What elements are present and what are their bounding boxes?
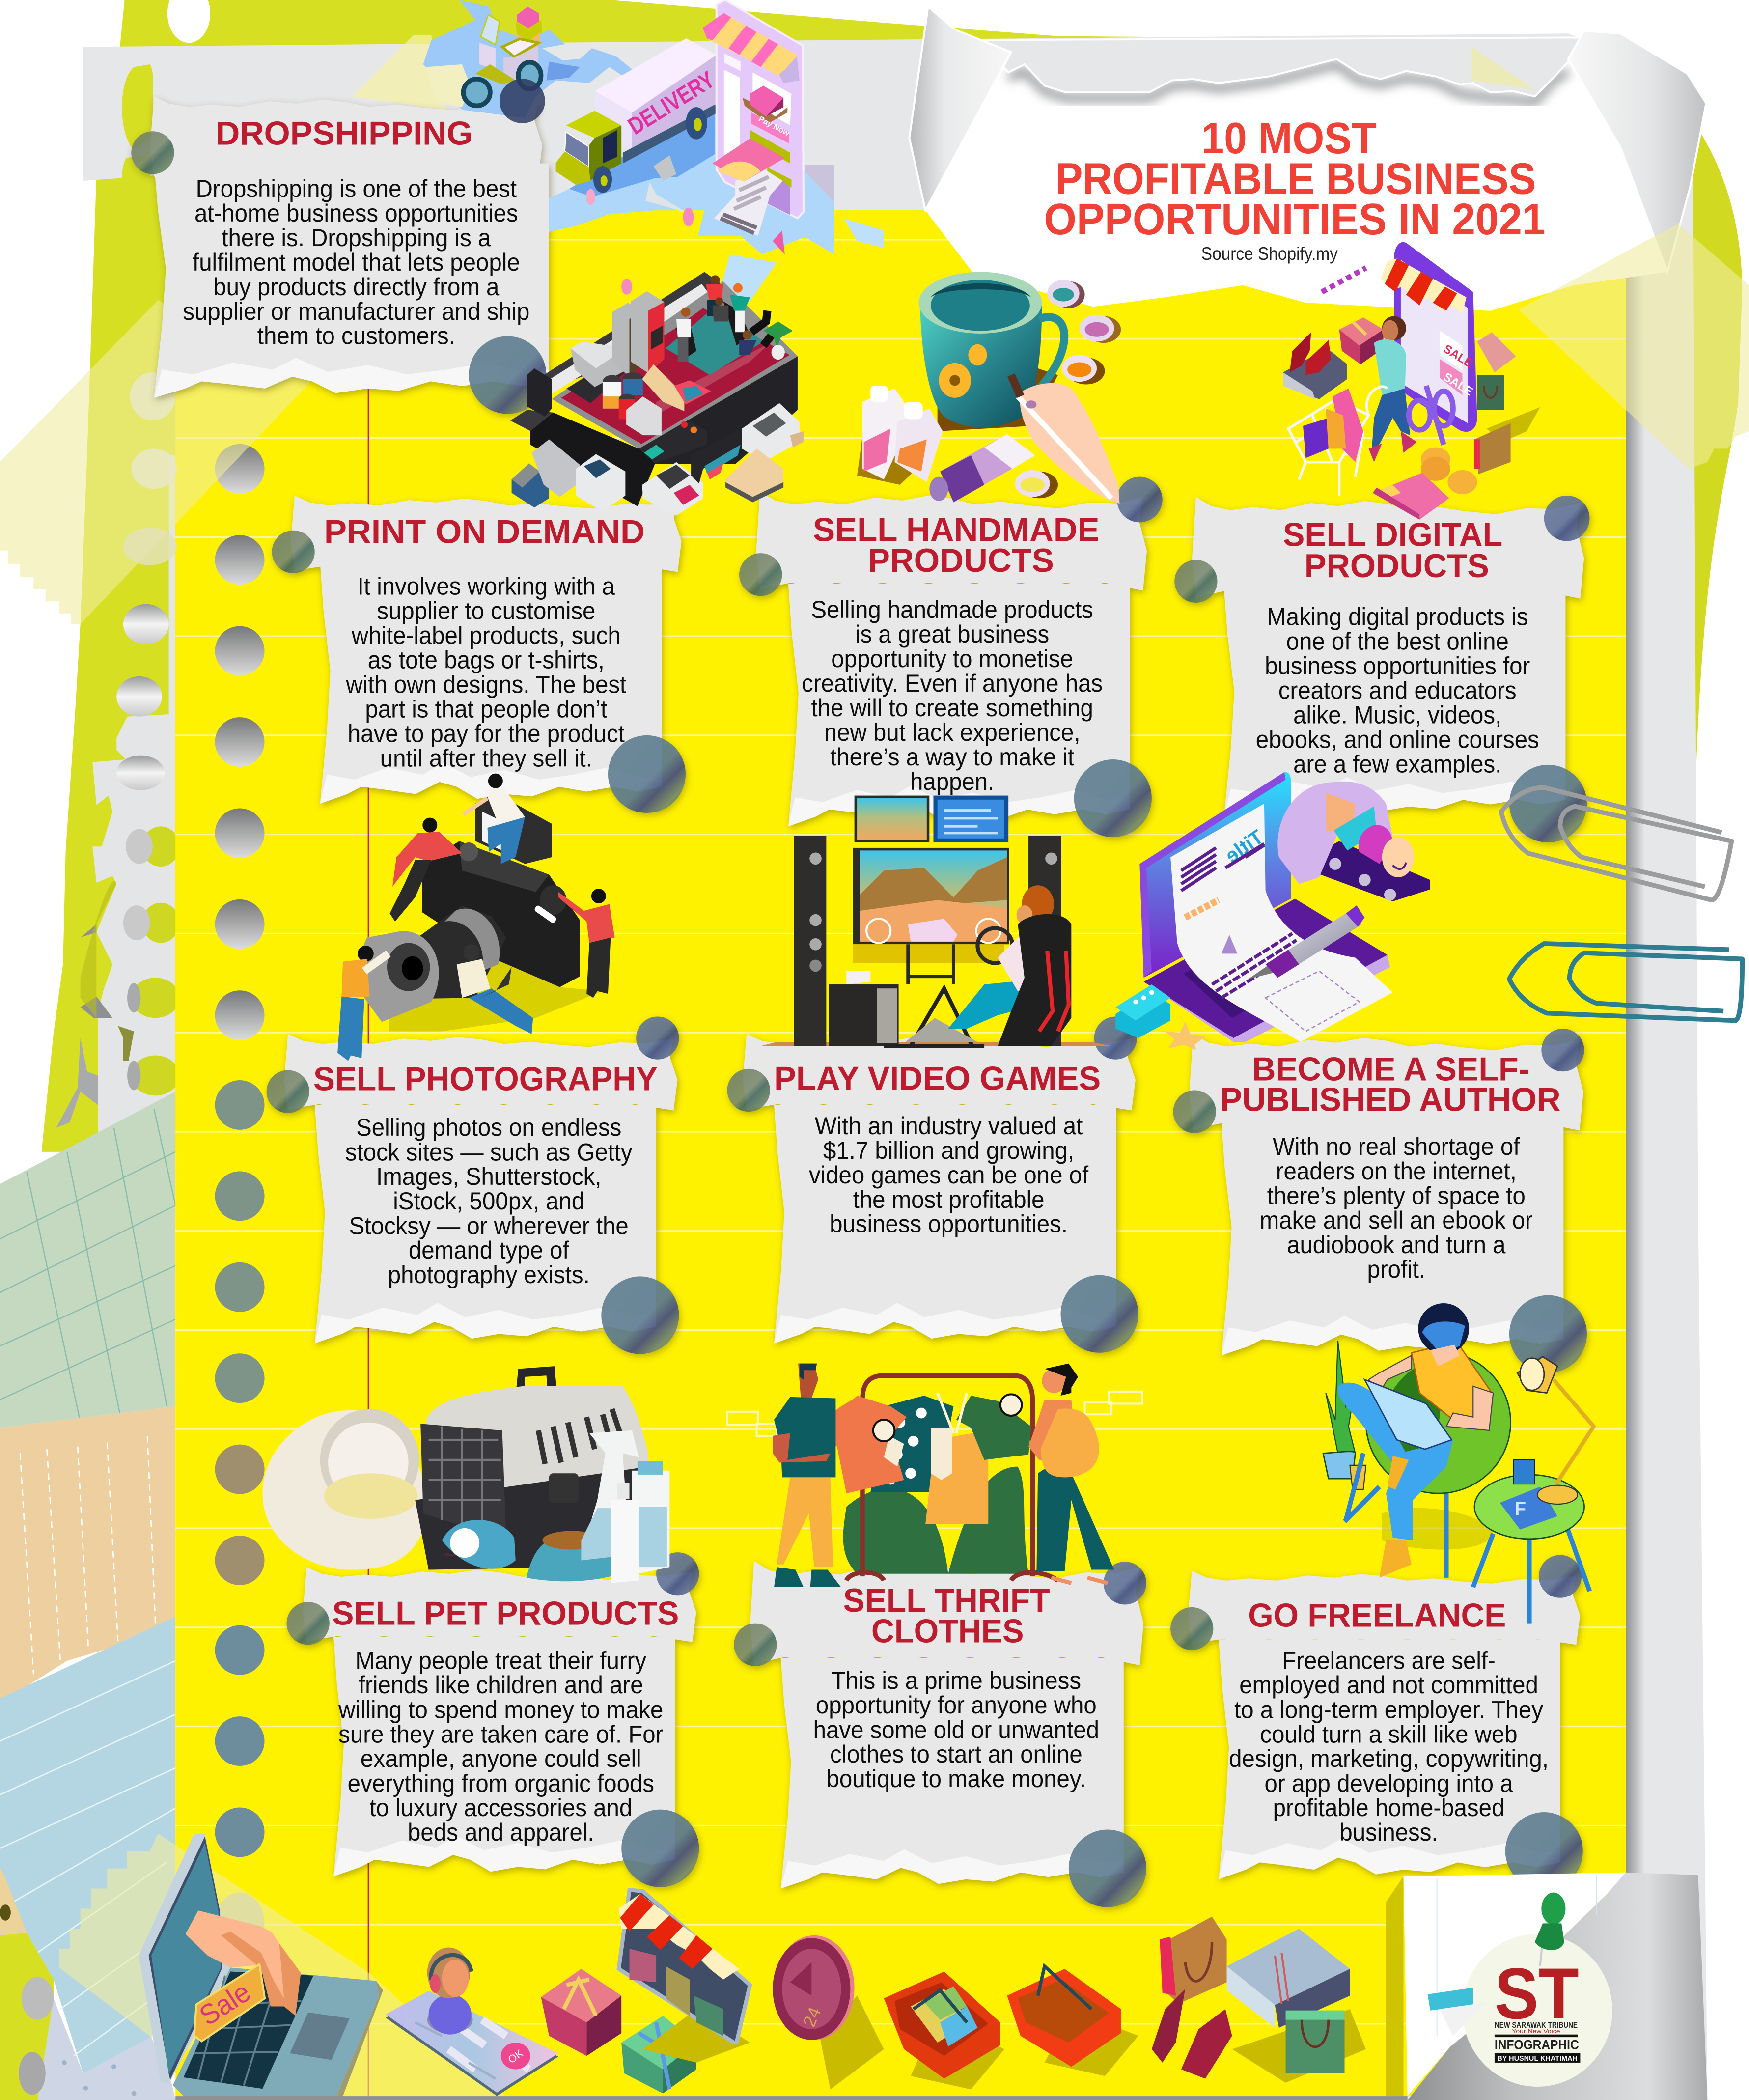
- heading: GO FREELANCE: [1248, 1597, 1506, 1634]
- body text: there’s a way to make it: [830, 744, 1075, 771]
- panel: sell thrift clothes: [734, 1561, 1146, 1907]
- body text: design, marketing, copywriting,: [1229, 1745, 1549, 1772]
- body text: With no real shortage of: [1273, 1133, 1520, 1160]
- spray bottles: [581, 1430, 669, 1583]
- logo badge: ST: [1495, 1954, 1579, 2034]
- pin over scooter: [500, 79, 545, 123]
- workers and table: [622, 275, 793, 375]
- bottom row: shopping baskets: [884, 1966, 1138, 2089]
- speakers: [794, 836, 1061, 1046]
- bags wallet coins card: [1373, 332, 1516, 520]
- body text: part is that people don’t: [365, 696, 608, 723]
- hand: [186, 1910, 301, 2016]
- heading: SELL PHOTOGRAPHY: [313, 1060, 658, 1097]
- body text: to luxury accessories and: [369, 1794, 632, 1822]
- truck: DELIVERY: [624, 66, 720, 140]
- body text: happen.: [910, 768, 994, 795]
- body text: video games can be one of: [809, 1162, 1089, 1189]
- body text: make and sell an ebook or: [1260, 1207, 1533, 1234]
- person: left red: [389, 818, 462, 922]
- body text: clothes to start an online: [830, 1741, 1083, 1768]
- gift on screen: [743, 86, 787, 123]
- heading: BECOME A SELF-: [1252, 1051, 1529, 1088]
- pins: [272, 531, 686, 813]
- carrier: [415, 1366, 648, 1570]
- green pushpin: [1535, 1893, 1565, 1966]
- pins: [1174, 496, 1589, 842]
- pins: [267, 1016, 679, 1354]
- body text: [1260, 1133, 1533, 1283]
- body text: [345, 1114, 633, 1288]
- body text: business.: [1339, 1819, 1438, 1846]
- conveyor with icons: [1277, 782, 1430, 901]
- panel: dropshipping: [131, 96, 549, 414]
- chat bubbles: [1115, 984, 1170, 1038]
- illustration: self-publishing laptop: [1115, 772, 1430, 1050]
- background paper: peach stitched: [0, 1406, 175, 1698]
- camera body: [422, 793, 580, 987]
- bottom edge: [175, 2096, 1408, 2100]
- location pins: [586, 189, 785, 295]
- heading: [1220, 1051, 1561, 1119]
- chair: [1345, 1351, 1511, 1578]
- body text: boutique to make money.: [826, 1765, 1086, 1792]
- body text: friends like children and are: [359, 1672, 643, 1699]
- tan edge, bottom left: [0, 1867, 27, 1935]
- logo badge: [1462, 1934, 1612, 2087]
- body text: there is. Dropshipping is a: [222, 224, 491, 252]
- yellow ruled sheet: [175, 210, 1626, 2096]
- body text: creators and educators: [1278, 677, 1517, 704]
- sale tag: Sale: [194, 1976, 256, 2032]
- floor: [552, 281, 798, 448]
- body text: supplier or manufacturer and ship: [183, 298, 529, 325]
- pins: [1173, 1029, 1587, 1373]
- background paper: green grid: [0, 1092, 175, 1428]
- title text: 10 MOST: [1201, 114, 1377, 163]
- receipt: [714, 169, 790, 236]
- body text: This is a prime business: [832, 1667, 1081, 1695]
- logo badge: BY HUSNUL KHATIMAH: [1497, 2054, 1578, 2063]
- body text: is a great business: [855, 621, 1049, 648]
- bottom row: bags, shoes and box: [1152, 1917, 1366, 2083]
- heading: CLOTHES: [871, 1612, 1024, 1650]
- person: [1337, 1303, 1493, 1578]
- body text: white-label products, such: [351, 622, 621, 649]
- small screens: [855, 796, 1008, 842]
- panel: go freelance: [1170, 1555, 1583, 1890]
- gift: [1339, 317, 1384, 364]
- heading: [1283, 516, 1502, 585]
- awning: [1381, 258, 1467, 313]
- translucent tape, upper left: [0, 35, 446, 624]
- stand: [908, 944, 953, 984]
- pen: [1248, 905, 1364, 979]
- body text: Selling photos on endless: [356, 1114, 621, 1141]
- body text: could turn a skill like web: [1260, 1721, 1518, 1748]
- leash: [442, 1520, 516, 1569]
- bottom row: phone with support agent: [386, 1947, 558, 2096]
- body text: the most profitable: [853, 1186, 1045, 1213]
- illustration: pet products: [262, 1366, 669, 1583]
- paint tube: [929, 434, 1035, 502]
- bed: [262, 1409, 429, 1570]
- body text: as tote bags or t-shirts,: [368, 646, 605, 674]
- bottles: [857, 386, 943, 485]
- body text: profit.: [1367, 1256, 1425, 1283]
- scooter: [463, 7, 542, 106]
- paint cups: [1015, 280, 1121, 498]
- heading: DROPSHIPPING: [216, 114, 473, 152]
- title text: [1044, 114, 1546, 244]
- person: right red: [558, 889, 615, 998]
- logo badge: NEW SARAWAK TRIBUNE: [1495, 2021, 1578, 2030]
- body text: Stocksy — or wherever the: [349, 1212, 629, 1240]
- percent: [1409, 386, 1453, 445]
- heading: PRODUCTS: [1305, 547, 1489, 585]
- heading: [843, 1582, 1050, 1650]
- awning: [702, 13, 798, 76]
- pillar: [527, 368, 552, 417]
- body text: the will to create something: [811, 695, 1093, 722]
- tape on logo: [1428, 1988, 1487, 2036]
- machines: [512, 291, 804, 516]
- heading: SELL HANDMADE: [813, 511, 1100, 549]
- panel: sell photography: [267, 1016, 679, 1354]
- body text: one of the best online: [1286, 628, 1509, 655]
- body text: employed and not committed: [1239, 1672, 1538, 1699]
- body text: Freelancers are self-: [1282, 1647, 1496, 1675]
- body text: Many people treat their furry: [355, 1647, 647, 1675]
- illustration: delivery truck and phone on map: [423, 0, 884, 301]
- paperclip: teal: [1509, 944, 1742, 1021]
- body text: [345, 573, 627, 772]
- credit card: [713, 139, 785, 182]
- heading: SELL DIGITAL: [1283, 516, 1502, 553]
- body text: stock sites — such as Getty: [345, 1139, 633, 1166]
- man: [773, 1364, 841, 1587]
- body text: have to pay for the product: [348, 720, 625, 748]
- title text: OPPORTUNITIES IN 2021: [1044, 195, 1546, 244]
- body text: supplier to customise: [377, 597, 595, 625]
- body text: opportunity to monetise: [831, 645, 1073, 672]
- stars: [1322, 268, 1366, 292]
- body text: sure they are taken care of. For: [338, 1721, 663, 1748]
- body text: Making digital products is: [1267, 603, 1528, 631]
- body text: demand type of: [409, 1237, 569, 1264]
- panel: sell handmade products: [739, 477, 1163, 837]
- body text: beds and apparel.: [408, 1819, 594, 1846]
- pins: [739, 477, 1163, 837]
- illustration: freelancer with laptop: [1323, 1303, 1594, 1624]
- body text: Selling handmade products: [811, 596, 1093, 623]
- illustration: digital shopping: SALE: [1441, 342, 1475, 370]
- hand and brush: [1011, 375, 1119, 504]
- decorative blocks: [727, 1392, 1142, 1436]
- paperclip: silver: [1501, 787, 1732, 900]
- body text: alike. Music, videos,: [1293, 701, 1501, 729]
- body text: Images, Shutterstock,: [376, 1163, 601, 1191]
- shoes on box: [1283, 332, 1347, 399]
- body text: [813, 1667, 1099, 1792]
- body text: fulfilment model that lets people: [193, 249, 520, 276]
- body text: business opportunities for: [1265, 652, 1530, 680]
- illustration: painted mug and brushes: [857, 272, 1121, 504]
- map: [423, 0, 884, 301]
- body text: audiobook and turn a: [1287, 1232, 1506, 1259]
- illustration: racing game setup: [761, 796, 1111, 1046]
- background paper: lilac dotted: [37, 1998, 175, 2100]
- rack: [846, 1375, 1058, 1580]
- bottom row: shop screen: [619, 1890, 750, 2063]
- body text: [802, 596, 1103, 795]
- table: [1473, 1460, 1589, 1624]
- body text: readers on the internet,: [1276, 1158, 1517, 1185]
- panel: sell pet products: [287, 1552, 699, 1887]
- logo badge: Your New Voice: [1512, 2028, 1560, 2035]
- document: Title: [1221, 825, 1267, 867]
- woman: [1028, 1364, 1114, 1583]
- panel: become a self-published author: [1173, 1029, 1587, 1373]
- bowl: [527, 1531, 620, 1581]
- binder holes: [215, 444, 265, 1954]
- body text: [338, 1647, 663, 1846]
- panel: print on demand: [272, 496, 686, 813]
- star: [1165, 1022, 1205, 1050]
- logo badge: INFOGRAPHIC: [1495, 2037, 1579, 2052]
- body text: [1256, 603, 1539, 778]
- phone storefront: [702, 0, 804, 236]
- body text: business opportunities.: [830, 1211, 1068, 1238]
- body text: them to customers.: [257, 323, 455, 350]
- document: [1170, 804, 1393, 1042]
- body text: Dropshipping is one of the best: [196, 175, 517, 202]
- heading: [813, 511, 1100, 579]
- bottom row: gift boxes: [541, 1969, 696, 2094]
- background paper: blue lined: [0, 1617, 175, 2073]
- body text: $1.7 billion and growing,: [823, 1137, 1074, 1164]
- heading: SELL PET PRODUCTS: [332, 1595, 679, 1632]
- heading: PUBLISHED AUTHOR: [1220, 1081, 1561, 1119]
- heading: PLAY VIDEO GAMES: [774, 1060, 1101, 1097]
- table: F: [1515, 1498, 1526, 1519]
- plants: [843, 1467, 1028, 1574]
- illustration: camera and photographers: [337, 774, 615, 1061]
- base sides: [510, 356, 798, 506]
- body text: to a long-term employer. They: [1234, 1696, 1543, 1724]
- truck: [556, 38, 720, 193]
- body text: are a few examples.: [1293, 751, 1501, 778]
- main screen: [853, 848, 1009, 944]
- sale tag: [194, 1964, 265, 2041]
- player: [948, 885, 1071, 1046]
- bottom tape, pale band over yellow: [59, 1834, 505, 2096]
- backing: lime paper: [42, 0, 1742, 1152]
- body text: With an industry valued at: [815, 1113, 1083, 1140]
- title torn opening: [909, 7, 1706, 311]
- panel: sell digital products: [1174, 496, 1589, 842]
- pay now button: Pay Now: [757, 114, 791, 138]
- person: top: [463, 774, 525, 864]
- lamp: [1517, 1357, 1594, 1504]
- translucent tape, upper right: [1519, 224, 1749, 469]
- body text: or app developing into a: [1265, 1770, 1513, 1797]
- pins: [131, 131, 546, 414]
- sim rig: [884, 988, 984, 1046]
- laptop: [1364, 1379, 1452, 1449]
- pins: [727, 1016, 1138, 1353]
- heading: PRODUCTS: [868, 542, 1054, 579]
- panel: play video games: [727, 1016, 1138, 1353]
- illustration: digital shopping: SALE: [1441, 370, 1475, 398]
- body text: opportunity for anyone who: [816, 1692, 1097, 1719]
- body text: there’s plenty of space to: [1267, 1182, 1526, 1209]
- person: lower left: [337, 946, 389, 1061]
- body text: iStock, 500px, and: [393, 1188, 584, 1215]
- body text: [183, 175, 529, 350]
- bottom row: clock: [773, 1935, 884, 2089]
- pins: [1170, 1555, 1583, 1890]
- woman: [1369, 316, 1417, 462]
- garments: [818, 1393, 1031, 1524]
- body text: at-home business opportunities: [194, 200, 518, 227]
- body text: ebooks, and online courses: [1256, 726, 1539, 754]
- heading: PRINT ON DEMAND: [324, 513, 645, 551]
- body text: have some old or unwanted: [813, 1716, 1099, 1744]
- bottom row: phone with support agent: OK: [506, 2047, 526, 2066]
- body text: willing to spend money to make: [338, 1696, 663, 1724]
- illustration: thrift clothes: [727, 1364, 1142, 1587]
- lens: [361, 905, 506, 1022]
- body text: until after they sell it.: [380, 745, 592, 772]
- source line: Source Shopify.my: [1201, 244, 1338, 264]
- pins: [287, 1552, 699, 1887]
- person: sitting: [457, 944, 533, 1034]
- pins: [734, 1562, 1146, 1907]
- bottom row: clock: 24: [799, 2004, 825, 2030]
- body text: [1229, 1647, 1549, 1846]
- heading: SELL THRIFT: [843, 1582, 1050, 1619]
- pc tower and controller: [829, 971, 899, 1046]
- bottom row: note paper and logo: [1386, 1873, 1707, 2100]
- body text: photography exists.: [388, 1261, 590, 1288]
- torn holes in lime and grey strip: [56, 604, 179, 1128]
- body text: new but lack experience,: [824, 719, 1080, 746]
- body text: everything from organic foods: [348, 1770, 654, 1797]
- title text: PROFITABLE BUSINESS: [1055, 154, 1536, 203]
- rear bar: [544, 272, 723, 389]
- body text: profitable home-based: [1273, 1794, 1504, 1822]
- body text: It involves working with a: [358, 573, 615, 600]
- illustration: print shop platform: [510, 272, 804, 516]
- body text: example, anyone could sell: [361, 1745, 641, 1772]
- pay now button: [751, 112, 791, 143]
- body text: [809, 1113, 1089, 1238]
- illustration: digital shopping: [1283, 242, 1540, 520]
- body text: with own designs. The best: [345, 671, 627, 699]
- cart: [1288, 387, 1388, 496]
- lime corner, bottom left: [0, 1932, 54, 2100]
- bottom row: laptop and sale tag: [139, 1834, 383, 2100]
- body text: creativity. Even if anyone has: [802, 670, 1103, 697]
- body text: buy products directly from a: [213, 274, 500, 301]
- plant: [1323, 1341, 1366, 1489]
